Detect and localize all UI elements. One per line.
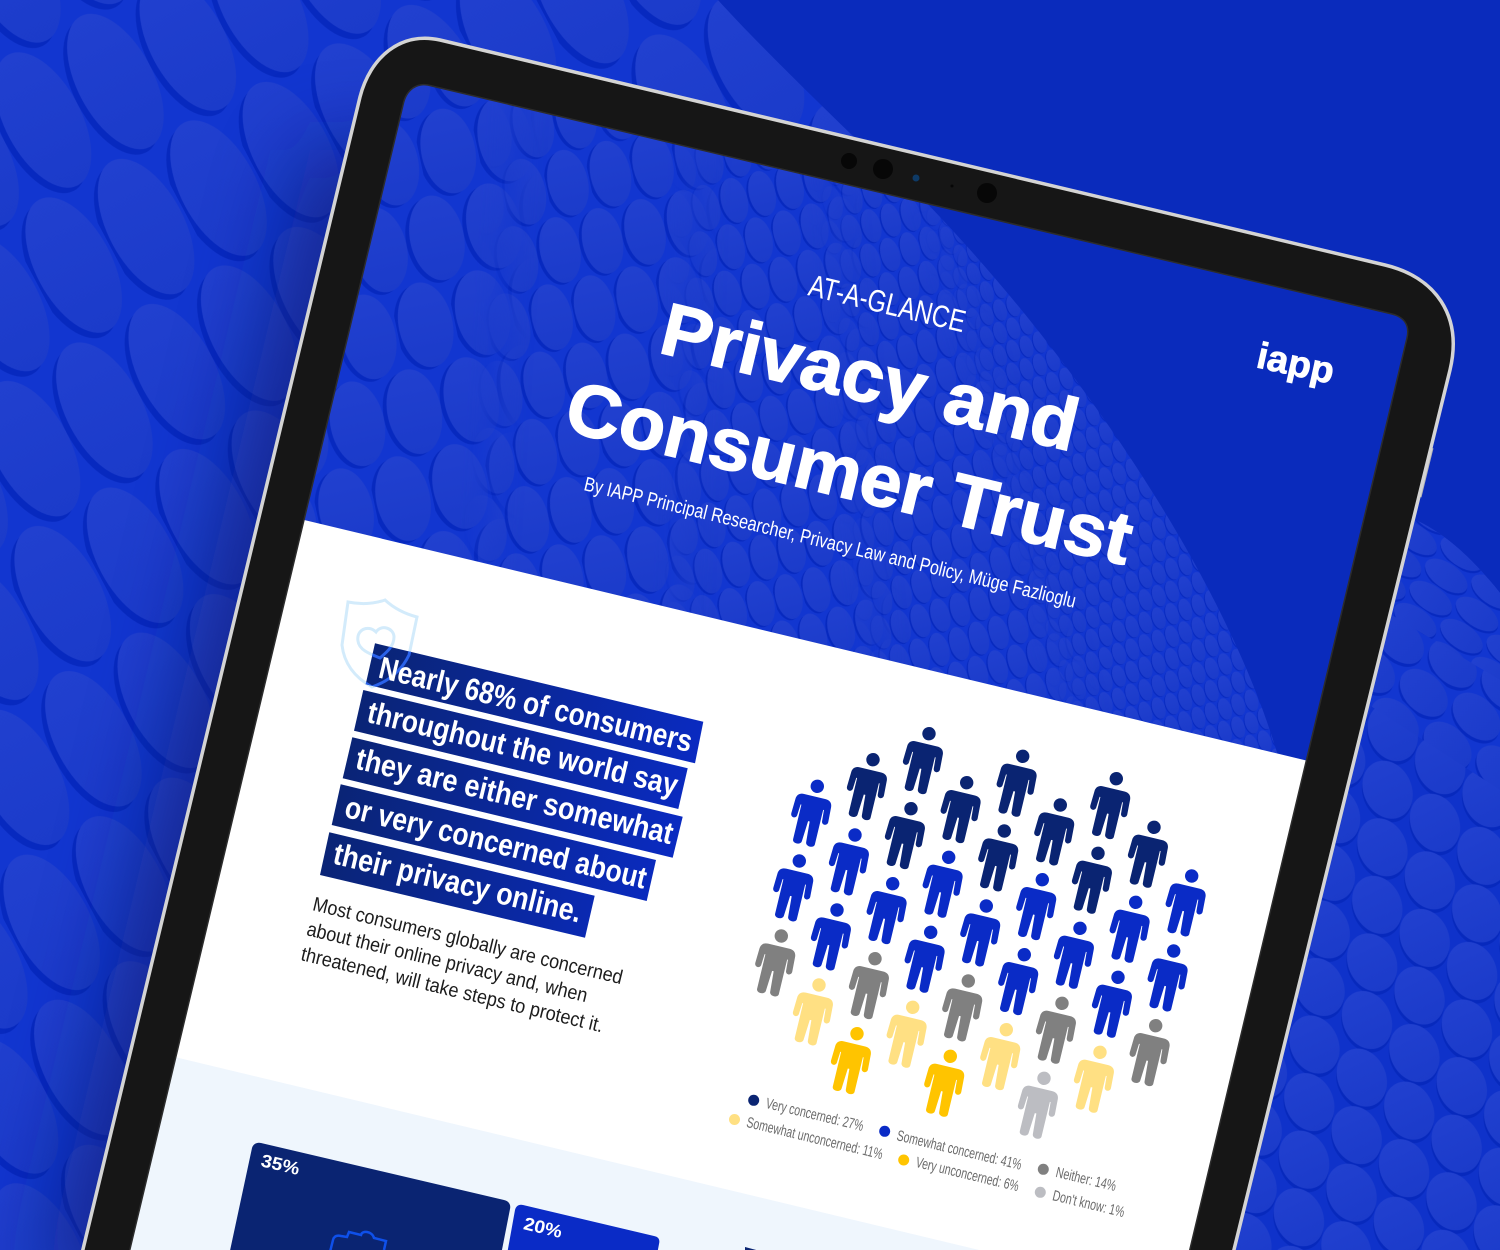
title: Privacy and: [653, 287, 1087, 467]
tablet cameras: [841, 153, 997, 203]
icon: clipboard: [330, 1232, 386, 1250]
icon: shield with heart: [342, 600, 417, 687]
people: very concerned: [840, 723, 1174, 916]
card 20%: [506, 1205, 659, 1250]
body text: threatened, will take steps to protect it.: [299, 943, 605, 1037]
pale band section: [130, 1058, 978, 1250]
highlight text: their privacy online.: [330, 836, 585, 929]
tablet side buttons: [1345, 256, 1445, 497]
legend markers: [729, 1095, 1049, 1198]
background: dome pattern lower right: [1236, 520, 1500, 1250]
background: tablet shadow: [40, 150, 420, 1250]
people: somewhat unconcerned: [786, 974, 1120, 1115]
header background: [928, 204, 1407, 760]
people: somewhat concerned: [767, 775, 1212, 1040]
chart: people pictogram: [749, 723, 1212, 1141]
legend labels: Somewhat unconcerned: 11%: [745, 1114, 884, 1163]
next card hint: [745, 1247, 756, 1250]
legend labels: Very concerned: 27%: [764, 1095, 865, 1135]
card value 20%: 20%: [522, 1213, 564, 1242]
legend labels: Neither: 14%: [1054, 1164, 1118, 1195]
legend labels: Don't know: 1%: [1051, 1187, 1126, 1221]
people: neither: [749, 925, 1176, 1089]
legend labels: [745, 1095, 1126, 1221]
body text: about their online privacy and, when: [305, 918, 590, 1007]
people: very unconcerned: [824, 1023, 970, 1119]
white content section: [176, 520, 1306, 1250]
legend labels: Somewhat concerned: 41%: [895, 1127, 1023, 1174]
card 35%: [228, 1143, 510, 1250]
background: dome pattern left: [0, 0, 853, 1250]
title: Consumer Trust: [558, 365, 1141, 581]
highlighted statement: [320, 643, 704, 938]
screen: [130, 85, 1407, 1250]
eyebrow: AT-A-GLANCE: AT-A-GLANCE: [805, 268, 969, 339]
body text: [299, 893, 625, 1037]
screen inner edge: [125, 85, 1408, 1250]
shield overlap on bar: [366, 646, 412, 687]
highlight text: [330, 650, 696, 929]
highlight text: they are either somewhat: [353, 741, 677, 851]
chart legend: [729, 1095, 1126, 1221]
highlight text: Nearly 68% of consumers: [376, 650, 696, 759]
people: don't know: [1011, 1067, 1064, 1141]
byline: By IAPP Principal Researcher, Privacy Law and Policy, Müge Fazlioglu: [582, 473, 1078, 613]
highlight text: or very concerned about: [342, 789, 650, 896]
highlight text: throughout the world say: [364, 694, 682, 803]
body text: Most consumers globally are concerned: [311, 893, 625, 989]
card value 35%: 35%: [259, 1150, 302, 1179]
logo: iapp: iapp: [1253, 335, 1338, 392]
highlight bars: [320, 643, 703, 938]
header dome pattern: [305, 86, 1278, 754]
legend labels: Very unconcerned: 6%: [914, 1154, 1021, 1195]
